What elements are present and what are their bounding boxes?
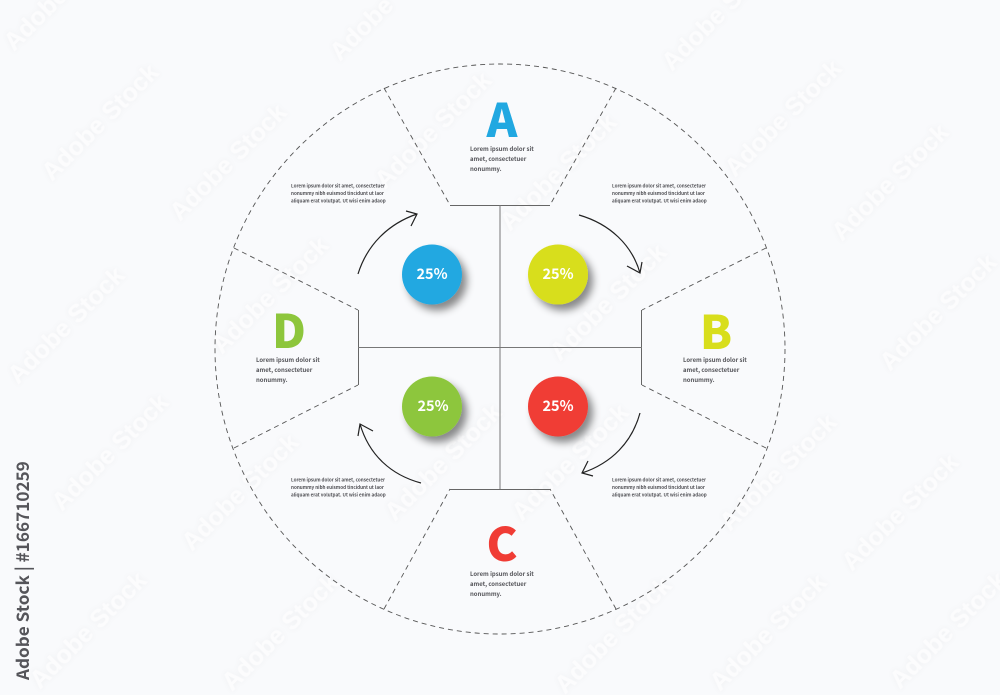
small text top right: nonummy nibh euismod tincidunt ut laor [612,190,705,197]
segment C: nonummy. [470,589,502,598]
small text bottom right: nonummy nibh euismod tincidunt ut laor [612,484,705,491]
segment A: Lorem ipsum dolor sit [470,144,534,153]
background watermarks: Adobe Stock [544,238,672,366]
background watermarks: Adobe Stock [46,388,174,516]
circle: green 25%: 25% [417,395,449,416]
segment C: C [486,508,518,575]
segment B: B [700,296,732,363]
small text top left: Lorem ipsum dolor sit amet, consectetuer [291,182,385,190]
arrow: top left [358,211,417,274]
background watermarks: Adobe Stock [704,568,832,695]
background watermarks: Adobe Stock [369,66,497,194]
small text top left: nonummy nibh euismod tincidunt ut laor [291,190,384,197]
background watermarks: Adobe Stock [874,248,1000,376]
background watermarks: Adobe Stock [836,448,964,576]
center cross lines [358,205,642,489]
segment A [470,84,534,173]
segment C [470,508,534,598]
circle: yellow 25% [528,244,588,304]
small text top left: aliquam erat volutpat. Ut wisi enim adaop [291,198,386,204]
circle: red 25% [528,376,588,436]
segment D: Lorem ipsum dolor sit [256,355,320,364]
background watermarks: Adobe Stock [24,566,152,694]
background watermarks: Adobe Stock [176,428,304,556]
background watermarks: Adobe Stock [826,118,954,246]
arrow: bottom left [358,424,421,483]
small text bottom left: Lorem ipsum dolor sit amet, consectetuer [291,476,385,484]
circle: blue 25% [402,244,462,304]
segment D: D [272,295,306,362]
outer dashed circle [215,64,785,634]
circle: red 25%: 25% [542,395,574,416]
segment C: Lorem ipsum dolor sit [470,569,534,578]
small text bottom left: aliquam erat volutpat. Ut wisi enim adaop [291,492,386,498]
background watermarks: Adobe Stock [494,108,622,236]
background watermarks: Adobe Stock [2,261,130,389]
background watermarks: Adobe Stock [216,568,344,695]
background watermarks: Adobe Stock [379,398,507,526]
circle: blue 25%: 25% [416,263,448,284]
background watermarks: Adobe Stock [719,54,847,182]
segment B: Lorem ipsum dolor sit [683,355,747,364]
segment B: nonummy. [683,375,715,384]
segment D: nonummy. [256,375,288,384]
small text bottom right: Lorem ipsum dolor sit amet, consectetuer [612,476,706,484]
segment A: amet, consectetuer [470,154,527,163]
arrow: bottom right [582,413,640,476]
circle: green 25% [402,376,462,436]
small text top right: aliquam erat volutpat. Ut wisi enim adaop [612,198,707,204]
background watermarks: Adobe Stock [206,231,334,359]
small text bottom right: aliquam erat volutpat. Ut wisi enim adaop [612,492,707,498]
segment B: amet, consectetuer [683,365,740,374]
small text bottom left: nonummy nibh euismod tincidunt ut laor [291,484,384,491]
stock id label: Adobe Stock | #166710259 [9,461,34,681]
small text top right: Lorem ipsum dolor sit amet, consectetuer [612,182,706,190]
segment B [683,296,747,384]
background watermarks: Adobe Stock [714,408,842,536]
segment C: amet, consectetuer [470,579,527,588]
background watermarks: Adobe Stock [36,58,164,186]
segment A: nonummy. [470,164,502,173]
segment D: amet, consectetuer [256,365,313,374]
circle: yellow 25%: 25% [542,263,574,284]
segment D [256,295,320,384]
background watermarks: Adobe Stock [506,398,634,526]
segment A: A [486,84,519,151]
arrow: top right [579,215,642,273]
background watermarks: Adobe Stock [164,98,292,226]
segment outlines [234,88,766,609]
